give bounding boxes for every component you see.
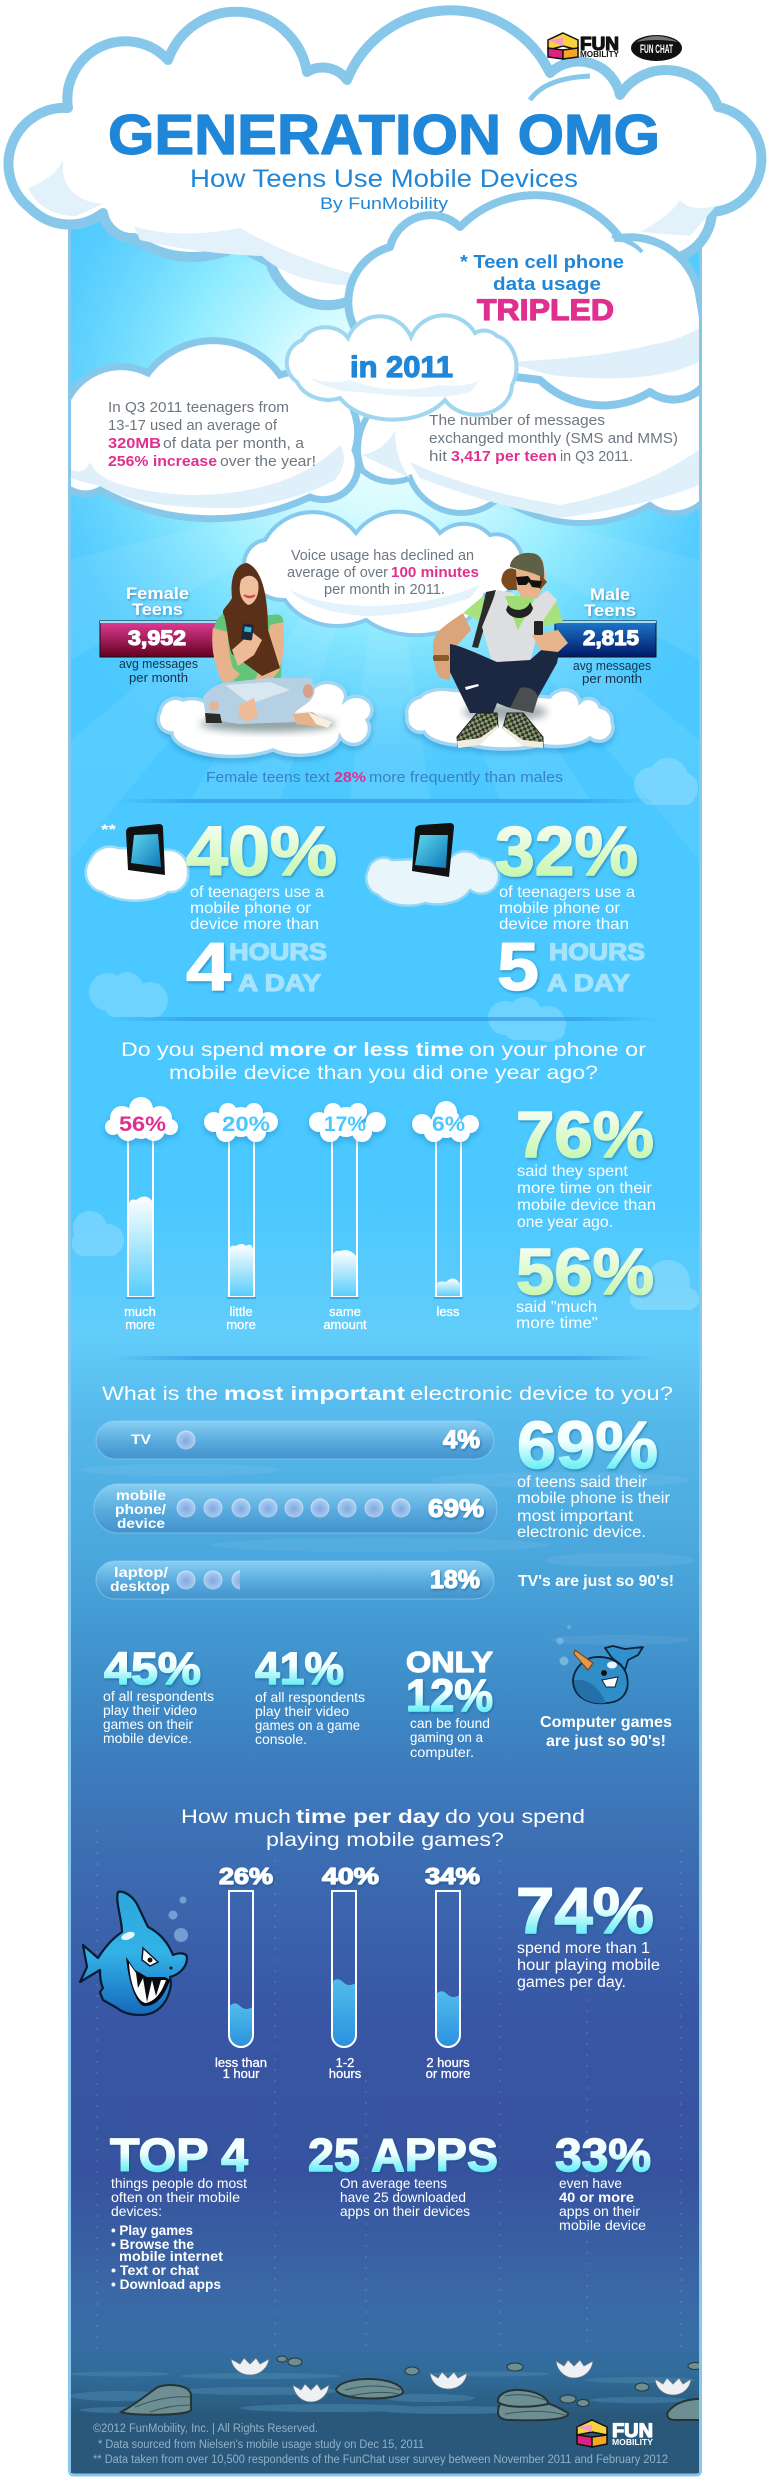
logo: FunMobility footer: FUN <box>612 2421 653 2442</box>
chart: cloud tube 17 percent same amount: amount <box>323 1317 367 1332</box>
text: message stats: The number of messages <box>429 412 605 429</box>
stat: 45 percent <box>103 1643 214 1746</box>
logo: FunChat <box>631 35 682 61</box>
stat: 76 percent <box>516 1098 656 1231</box>
title: GENERATION OMG <box>108 103 660 167</box>
text: copyright and sources: ©2012 FunMobility, Inc. | All Rights Reserved. <box>93 2423 318 2435</box>
stat: 45 percent: games on their <box>103 1716 193 1732</box>
heading: time per day: playing mobile games? <box>266 1829 504 1851</box>
panel: female teens stat: Female <box>126 585 189 603</box>
stat: 32 percent: mobile phone or <box>499 900 621 917</box>
stat: 25 apps: On average teens <box>340 2175 447 2191</box>
chart: test tube 34 percent: 2 hours <box>426 2055 470 2070</box>
chart: cloud tube 56 percent much more <box>105 1097 178 1332</box>
stat: 32 percent: 32% <box>495 812 638 890</box>
text: female vs male frequency: 28% <box>334 770 366 786</box>
cloud icon: pale cloud with phone <box>366 823 499 906</box>
logo: FunMobility top <box>548 33 620 59</box>
panel: male teens stat: Male <box>590 586 630 604</box>
text: copyright and sources <box>93 2423 668 2466</box>
text: message stats: hit <box>429 448 448 465</box>
subtitle: How Teens Use Mobile Devices <box>190 165 578 193</box>
stat: 69 percent: most important <box>517 1508 634 1525</box>
chart: cloud tube 56 percent much more: 56% <box>119 1113 166 1136</box>
stat: 40 percent: 40% <box>186 812 337 890</box>
chart: cloud tube 17 percent same amount <box>309 1103 386 1332</box>
cloud: messages text cloud <box>358 381 699 526</box>
stat: top 4: • Browse the <box>111 2236 194 2252</box>
stat: 33 percent: apps on their <box>559 2203 640 2219</box>
stat: 69 percent: electronic device. <box>517 1524 646 1541</box>
chart: cloud tube 20 percent little more: 20% <box>222 1113 270 1136</box>
chart: cloud tube 20 percent little more <box>204 1103 278 1332</box>
callout: computer games are just so 90s <box>540 1714 672 1750</box>
chart: cloud tube 6 percent less: 6% <box>432 1113 465 1136</box>
chart: test tube 40 percent: 1-2 <box>336 2055 354 2070</box>
callout: computer games are just so 90s: Computer games <box>540 1714 672 1731</box>
stat: 74 percent: spend more than 1 <box>517 1940 650 1957</box>
stat: 25 apps <box>308 2129 498 2219</box>
stat: 69 percent <box>517 1408 670 1541</box>
cloud: teen data usage tripled: data usage <box>493 273 601 294</box>
callout: computer games are just so 90s: are just so 90's! <box>546 1733 666 1750</box>
stat: 45 percent: of all respondents <box>103 1688 214 1704</box>
chart: cloud tube 17 percent same amount: same <box>329 1304 361 1319</box>
heading: more or less time: more or less time <box>269 1039 464 1061</box>
heading: more or less time: on your phone or <box>469 1039 647 1061</box>
panel: male teens stat: 2,815 <box>583 627 639 650</box>
text: data usage stats: 320MB <box>108 435 161 452</box>
chart bar: mobile phone 69 percent: mobile <box>116 1487 166 1503</box>
chart bar: mobile phone 69 percent: 69% <box>428 1495 484 1523</box>
chart: cloud tube 20 percent little more: more <box>226 1317 256 1332</box>
stat: 33 percent <box>555 2129 651 2233</box>
heading: more or less time: Do you spend <box>121 1039 264 1061</box>
panel: male teens stat: per month <box>582 671 642 686</box>
panel: male teens stat: avg messages <box>573 658 651 673</box>
stat: 41 percent: of all respondents <box>255 1689 365 1705</box>
stat: only 12 percent: computer. <box>410 1744 474 1760</box>
chart bar: laptop 18 percent: 18% <box>430 1566 480 1594</box>
icon: narwhal <box>556 1625 643 1703</box>
chart bar: TV 4 percent: TV <box>131 1431 152 1447</box>
heading: time per day: How much <box>181 1806 291 1828</box>
stat: top 4: things people do most <box>111 2175 247 2191</box>
text: data usage stats: 13-17 used an average of <box>108 417 278 434</box>
stat: 76 percent: said they spent <box>517 1163 629 1180</box>
stat: top 4: devices: <box>111 2203 162 2219</box>
heading: time per day <box>181 1806 585 1851</box>
cloud: teen data usage tripled: * Teen cell phone <box>460 251 624 272</box>
stat: 76 percent: 76% <box>516 1098 654 1171</box>
stat: 74 percent: games per day. <box>517 1974 626 1991</box>
stat: top 4: often on their mobile <box>111 2189 240 2205</box>
text: message stats <box>429 412 678 465</box>
panel: male teens stat <box>555 586 656 686</box>
heading: most important device: most important <box>224 1383 406 1405</box>
chart bar: TV 4 percent: 4% <box>443 1426 480 1454</box>
cloud: voice usage <box>244 512 523 635</box>
heading: time per day: do you spend <box>445 1806 585 1828</box>
cloud: teen data usage tripled <box>348 195 712 405</box>
logo: FunMobility footer: MOBILITY <box>612 2438 654 2447</box>
decorative faded cloud <box>634 758 698 805</box>
chart: test tube 34 percent: or more <box>426 2066 470 2081</box>
chart: cloud tube 56 percent much more: much <box>124 1304 156 1319</box>
panel: female teens stat: avg messages <box>119 656 198 671</box>
panel: male teens stat: Teens <box>584 602 636 620</box>
chart bar: mobile phone 69 percent: device <box>117 1515 165 1531</box>
chart bar: TV 4 percent <box>96 1421 494 1459</box>
cloud: data usage text cloud <box>60 341 358 519</box>
panel: sky to sea background <box>70 190 700 2475</box>
text: double asterisk note: ** <box>101 821 117 837</box>
chart: cloud tube 6 percent less <box>412 1101 479 1319</box>
stat: 32 percent <box>495 812 645 1005</box>
text: female vs male frequency: more frequently than males <box>369 770 563 786</box>
stat: 69 percent: mobile phone is their <box>517 1490 670 1507</box>
heading: time per day: time per day <box>296 1806 440 1828</box>
stat: top 4 <box>110 2129 248 2292</box>
stat: top 4: • Download apps <box>111 2276 221 2292</box>
callout: TVs are just so 90s: TV's are just so 90's! <box>518 1573 674 1590</box>
stat: 33 percent: 40 or more <box>559 2189 634 2205</box>
byline: By FunMobility <box>320 195 449 213</box>
stat: 56 percent: more time" <box>516 1315 598 1332</box>
stat: 40 percent <box>186 812 337 1005</box>
stat: 40 percent: device more than <box>190 916 319 933</box>
cloud: under female teen <box>158 682 372 756</box>
scene: sea floor with rocks and shells <box>71 2356 699 2473</box>
stat: 76 percent: one year ago. <box>517 1214 613 1231</box>
cloud: in 2011 <box>287 315 517 420</box>
chart bar: laptop 18 percent <box>96 1561 494 1599</box>
stat: 41 percent: console. <box>255 1731 307 1747</box>
stat: 76 percent: mobile device than <box>517 1197 656 1214</box>
stat: 45 percent: 45% <box>104 1643 201 1694</box>
chart: test tube 40 percent: hours <box>329 2066 362 2081</box>
stat: 32 percent: device more than <box>499 916 629 933</box>
stat: 69 percent: 69% <box>517 1408 658 1483</box>
stat: 33 percent: 33% <box>555 2129 651 2181</box>
chart bar: laptop 18 percent: laptop/ <box>114 1564 168 1580</box>
stat: only 12 percent: ONLY <box>406 1647 493 1679</box>
text: message stats: in Q3 2011. <box>560 448 633 465</box>
stat: 41 percent: play their video <box>255 1703 349 1719</box>
stat: 56 percent: 56% <box>516 1235 654 1308</box>
stat: top 4: • Text or chat <box>111 2262 199 2278</box>
chart bar: laptop 18 percent: desktop <box>110 1578 170 1594</box>
chart: test tube 34 percent <box>425 1863 480 2081</box>
panel: female teens stat: per month <box>129 670 188 685</box>
chart: cloud tube 56 percent much more: more <box>125 1317 155 1332</box>
stat: 40 percent: HOURS <box>229 939 327 966</box>
chart: test tube 34 percent: 34% <box>425 1863 480 1889</box>
stat: 40 percent: mobile phone or <box>190 900 312 917</box>
chart: test tube 40 percent: 40% <box>322 1863 379 1889</box>
text: data usage stats: of data per month, a <box>163 435 305 452</box>
stat: only 12 percent <box>406 1647 493 1760</box>
stat: 45 percent: mobile device. <box>103 1730 192 1746</box>
heading: more or less time <box>121 1039 647 1084</box>
stat: 40 percent: 4 <box>186 929 231 1005</box>
stat: 74 percent <box>516 1874 660 1991</box>
stat: 74 percent: 74% <box>516 1874 654 1947</box>
heading: most important device <box>102 1383 673 1405</box>
stat: 40 percent: of teenagers use a <box>190 884 324 901</box>
stat: 32 percent: HOURS <box>549 939 645 966</box>
stat: 69 percent: of teens said their <box>517 1474 647 1491</box>
stat: 33 percent: mobile device <box>559 2217 646 2233</box>
stat: 32 percent: A DAY <box>547 970 630 997</box>
chart bar: mobile phone 69 percent: phone/ <box>115 1501 166 1517</box>
stat: 32 percent: 5 <box>497 929 539 1005</box>
cloud: voice usage: average of over <box>287 564 388 581</box>
chart: cloud tube 6 percent less: less <box>436 1304 460 1319</box>
photo: male teen with phone <box>433 553 568 748</box>
stat: 32 percent: of teenagers use a <box>499 884 635 901</box>
logo: FunMobility top: FUN <box>580 34 619 54</box>
stat: top 4: • Play games <box>111 2222 193 2238</box>
chart bar: mobile phone 69 percent <box>94 1484 497 1533</box>
chart: test tube 26 percent <box>215 1863 273 2081</box>
stat: 33 percent: even have <box>559 2175 622 2191</box>
text: copyright and sources: ** Data taken from over 10,500 respondents of the FunChat user survey between November 2011 and February 2012 <box>93 2454 668 2466</box>
heading: more or less time: mobile device than you did one year ago? <box>169 1062 598 1084</box>
stat: top 4: TOP 4 <box>110 2129 248 2181</box>
text: data usage stats <box>108 399 316 470</box>
chart: test tube 40 percent <box>322 1863 379 2081</box>
logo: FunMobility footer <box>577 2420 654 2447</box>
text: message stats: exchanged monthly (SMS and MMS) <box>429 430 678 447</box>
text: data usage stats: over the year! <box>220 453 316 470</box>
stat: 56 percent: said "much <box>516 1299 597 1316</box>
stat: 41 percent: 41% <box>255 1643 344 1694</box>
chart: test tube 26 percent: 1 hour <box>223 2066 260 2081</box>
photo: female teen with phone <box>200 563 336 732</box>
stat: 40 percent: A DAY <box>238 970 321 997</box>
cloud icon: white cloud with phone <box>86 824 188 901</box>
chart: test tube 26 percent: 26% <box>219 1863 273 1889</box>
stat: 76 percent: more time on their <box>517 1180 652 1197</box>
panel: female teens stat: Teens <box>132 601 183 619</box>
chart: cloud tube 20 percent little more: little <box>229 1304 253 1319</box>
heading: most important device: electronic device to you? <box>410 1383 673 1405</box>
cloud: under male teen <box>407 689 613 749</box>
text: female vs male frequency: Female teens text <box>206 770 330 786</box>
cloud: voice usage: 100 minutes <box>391 564 479 581</box>
logo: FunChat: FUN CHAT <box>640 42 673 56</box>
heading: most important device: What is the <box>102 1383 218 1405</box>
logo: FunMobility top: MOBILITY <box>580 50 620 59</box>
cloud: title cloud <box>9 10 761 305</box>
icon: shark <box>80 1892 188 2015</box>
stat: top 4: mobile internet <box>119 2248 223 2264</box>
stat: only 12 percent: gaming on a <box>410 1729 483 1745</box>
cloud: in 2011: in 2011 <box>350 351 453 384</box>
text: data usage stats: In Q3 2011 teenagers from <box>108 399 289 416</box>
chart: test tube 26 percent: less than <box>215 2055 267 2070</box>
cloud: voice usage: Voice usage has declined an <box>291 547 474 564</box>
text: copyright and sources: * Data sourced from Nielsen's mobile usage study on Dec 15, 2011 <box>98 2439 424 2451</box>
stat: only 12 percent: can be found <box>410 1715 490 1731</box>
stat: 41 percent <box>255 1643 365 1747</box>
panel: female teens stat <box>100 585 220 685</box>
panel: female teens stat: 3,952 <box>128 627 186 650</box>
text: data usage stats: 256% increase <box>108 453 217 470</box>
stat: 25 apps: have 25 downloaded <box>340 2189 466 2205</box>
stat: 25 apps: 25 APPS <box>308 2129 498 2181</box>
cloud: voice usage: per month in 2011. <box>324 581 445 598</box>
stat: 41 percent: games on a game <box>255 1717 360 1733</box>
stat: 74 percent: hour playing mobile <box>517 1957 660 1974</box>
stat: only 12 percent: 12% <box>406 1670 493 1721</box>
chart: cloud tube 17 percent same amount: 17% <box>324 1113 366 1136</box>
stat: 45 percent: play their video <box>103 1702 197 1718</box>
text: female vs male frequency <box>206 770 563 786</box>
cloud: teen data usage tripled: TRIPLED <box>477 294 614 327</box>
text: message stats: 3,417 per teen <box>451 448 557 465</box>
stat: 25 apps: apps on their devices <box>340 2203 470 2219</box>
